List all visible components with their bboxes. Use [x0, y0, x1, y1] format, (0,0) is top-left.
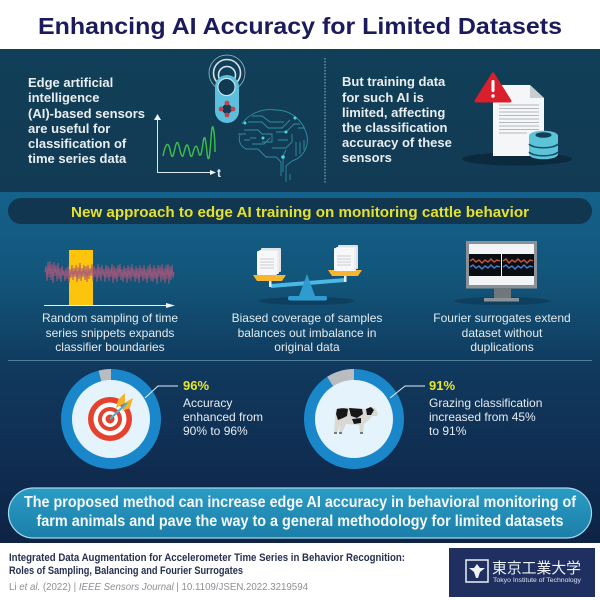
- text: edge AI sensors: time series data: [28, 151, 127, 166]
- text: fourier surrogates: dataset without: [462, 326, 543, 340]
- citation: Li et al. (2022) | IEEE Sensors Journal | 10.1109/JSEN.2022.3219594: [9, 581, 308, 593]
- banner: [8, 198, 592, 224]
- text: limited training data: for such AI is: [342, 90, 424, 105]
- text: biased coverage: Biased coverage of samples: [232, 311, 382, 325]
- text: edge AI sensors: classification of: [28, 136, 127, 151]
- icon: circuit brain: [238, 110, 307, 182]
- text: edge AI sensors: intelligence: [28, 90, 100, 105]
- text: random sampling: series snippets expands: [46, 326, 174, 340]
- donut: 96 percent with target: [61, 369, 161, 469]
- callout: 91 percent: 91%: [429, 378, 455, 393]
- text: edge AI sensors: are useful for: [28, 121, 110, 136]
- callout: 96 percent: [145, 378, 263, 438]
- text: random sampling: classifier boundaries: [55, 340, 165, 354]
- callout: 91 percent: to 91%: [429, 424, 467, 438]
- title: Enhancing AI Accuracy for Limited Datasets: [38, 13, 562, 39]
- callout: 91 percent: [390, 378, 542, 438]
- chart: time series signal: t: [217, 166, 221, 180]
- text: biased coverage: balances out imbalance in: [238, 326, 376, 340]
- text: random sampling: Random sampling of time: [42, 311, 178, 325]
- icon: cow: [334, 407, 378, 433]
- callout: 91 percent: increased from 45%: [429, 410, 536, 424]
- logo: Tokyo Institute of Technology: 東京工業大学: [492, 560, 581, 577]
- text: limited training data: But training data: [342, 74, 446, 89]
- banner: New approach to edge AI training on monitoring cattle behavior: [71, 204, 529, 221]
- text: biased coverage: original data: [274, 340, 340, 354]
- conclusion banner: [8, 488, 592, 538]
- callout: 91 percent: Grazing classification: [429, 396, 542, 410]
- citation: Integrated Data Augmentation for Accelerometer Time Series in Behavior Recognition:: [9, 552, 405, 564]
- panel: background problem: [0, 49, 600, 192]
- icon: brain nodes: [244, 116, 296, 159]
- text: edge AI sensors: (AI)-based sensors: [28, 106, 145, 121]
- text: limited training data: the classification: [342, 120, 448, 135]
- icon: balance scale: [253, 245, 362, 305]
- citation: Roles of Sampling, Balancing and Fourier Surrogates: [9, 565, 243, 577]
- divider: [324, 58, 326, 184]
- text: edge AI sensors: Edge artificial: [28, 75, 113, 90]
- text: limited training data: limited, affecting: [342, 105, 445, 120]
- panel: new approach: [0, 192, 600, 360]
- text: fourier surrogates: Fourier surrogates extend: [433, 311, 571, 325]
- panel: results: [0, 360, 600, 543]
- text: limited training data: accuracy of these: [342, 135, 452, 150]
- chart: time series signal: [154, 114, 221, 180]
- icon: document with alert and database: [462, 74, 572, 166]
- icon: monitor: [454, 241, 550, 305]
- callout: 96 percent: 90% to 96%: [183, 424, 248, 438]
- logo: Tokyo Institute of Technology: Tokyo Institute of Technology: [493, 577, 582, 584]
- icon: time series snippet: [44, 250, 175, 308]
- text: fourier surrogates: duplications: [470, 340, 534, 354]
- icon: wearable sensor: [209, 55, 245, 123]
- callout: 96 percent: 96%: [183, 378, 209, 393]
- citation: [9, 552, 405, 593]
- donut: 91 percent with cow: [304, 369, 404, 469]
- text: limited training data: sensors: [342, 150, 392, 165]
- callout: 96 percent: enhanced from: [183, 410, 263, 424]
- logo: Tokyo Institute of Technology: [449, 548, 595, 597]
- conclusion banner: farm animals and pave the way to a general methodology for limited datasets: [36, 513, 564, 530]
- callout: 96 percent: Accuracy: [183, 396, 232, 410]
